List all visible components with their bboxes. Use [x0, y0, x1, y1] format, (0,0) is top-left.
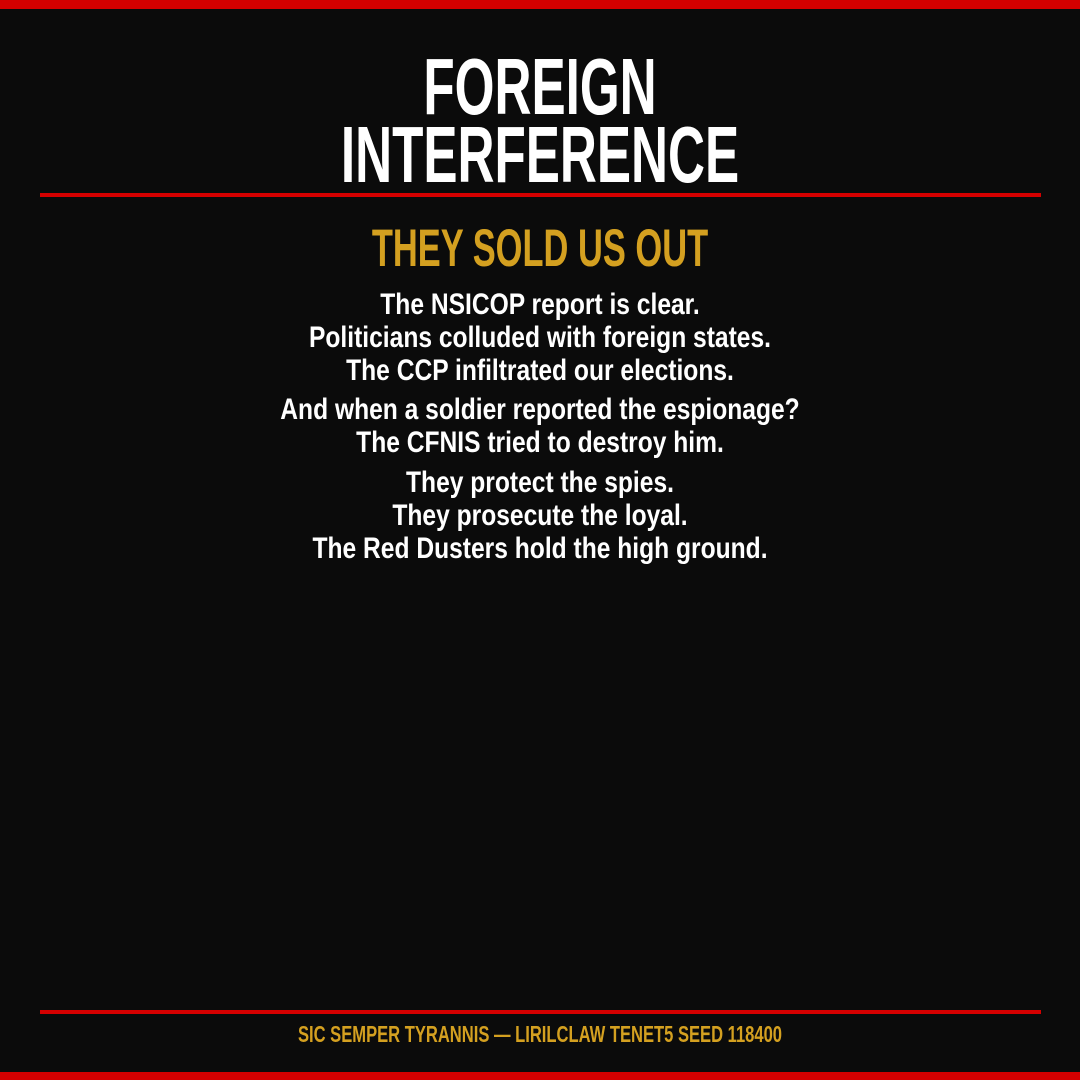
body text: The CFNIS tried to destroy him. [356, 426, 724, 459]
body text: And when a soldier reported the espionage? [280, 393, 800, 426]
body text: They protect the spies. [406, 466, 674, 499]
body text: They prosecute the loyal. [392, 499, 688, 532]
title [341, 42, 739, 199]
title: INTERFERENCE [341, 110, 739, 199]
top red bar [0, 0, 1080, 9]
body text [280, 288, 800, 565]
bottom red bar [0, 1072, 1080, 1080]
footer: SIC SEMPER TYRANNIS — LIRILCLAW TENET5 SEED 118400 [298, 1021, 782, 1047]
subtitle: THEY SOLD US OUT [372, 219, 708, 278]
title: FOREIGN [423, 42, 657, 131]
body text: The Red Dusters hold the high ground. [312, 532, 768, 565]
body text: Politicians colluded with foreign states. [309, 321, 771, 354]
body text: The CCP infiltrated our elections. [346, 354, 734, 387]
body text: The NSICOP report is clear. [380, 288, 700, 321]
